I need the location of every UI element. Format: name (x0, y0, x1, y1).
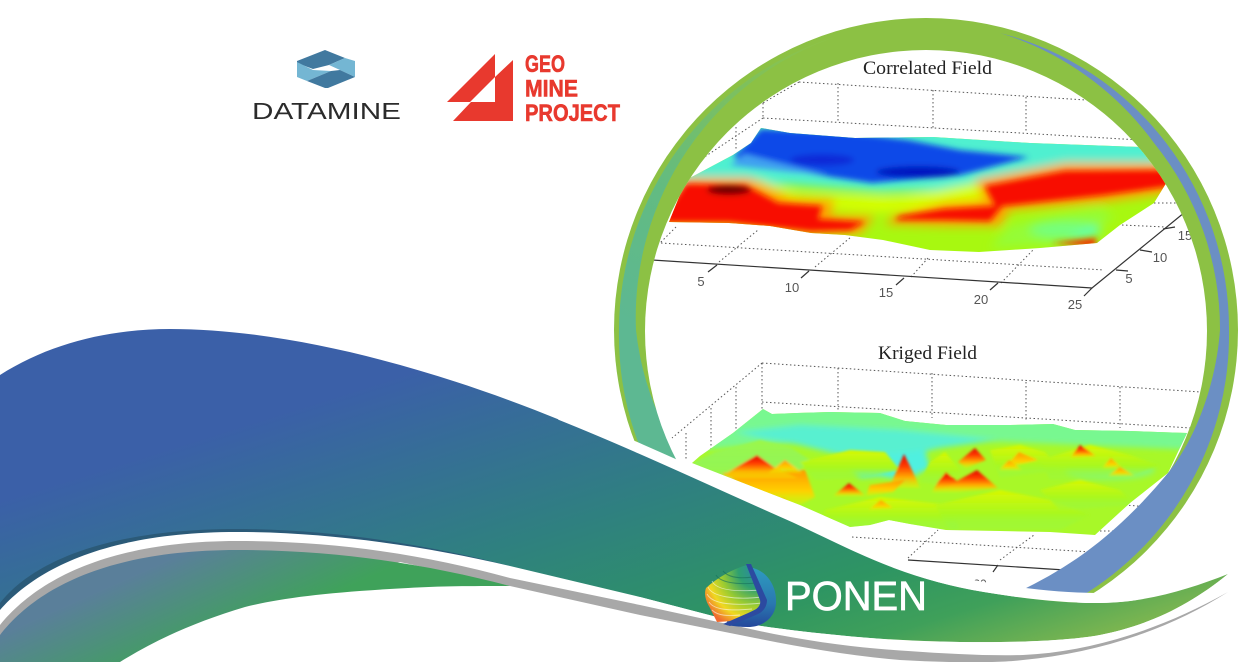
wordmark: DATAMINE: DATAMINE (252, 98, 401, 124)
wave: main gradient shape (0, 329, 1228, 642)
axis labels: 5 (1125, 271, 1133, 286)
chart images clipped to the circle (640, 59, 1201, 591)
axis labels: 10 (785, 280, 799, 295)
logo: Ponen (705, 564, 927, 627)
icon: red triangles (447, 54, 513, 121)
chart: Kriged Field (672, 344, 1201, 591)
ribbon: layered sweep under the wave (0, 529, 1240, 662)
grid lines (660, 82, 1179, 283)
wordmark: GEO MINE PROJECT: MINE (525, 76, 578, 102)
axis (908, 560, 1065, 572)
icon: Datamine hexagon (297, 50, 355, 88)
white interior (645, 50, 1207, 612)
wave: white highlight along the upper edge (560, 415, 1137, 598)
axis labels: 20 (974, 292, 988, 307)
ribbon inner gradient (0, 550, 510, 662)
ribbon dark edge (0, 529, 510, 662)
wordmark: GEO MINE PROJECT (525, 51, 620, 127)
green outer ring (614, 18, 1238, 642)
axis labels: 10 (1153, 250, 1167, 265)
axis label: 20 (973, 577, 987, 591)
axis labels: 5 (697, 274, 705, 289)
axis labels: 15 (1178, 228, 1192, 243)
axis labels (697, 228, 1192, 312)
circular frame (614, 18, 1238, 642)
logo: Datamine (252, 50, 401, 124)
blue right crescent (1000, 33, 1229, 597)
title: Correlated Field: Correlated Field (863, 59, 993, 79)
teal left crescent (619, 37, 835, 470)
axis labels: 15 (879, 285, 893, 300)
wordmark: GEO MINE PROJECT: PROJECT (525, 100, 620, 127)
title: Kriged Field: Kriged Field (878, 344, 978, 364)
surface: correlated heat map (669, 128, 1166, 252)
grid lines (672, 363, 1201, 560)
axis labels: 25 (1068, 297, 1082, 312)
axes (652, 208, 1190, 296)
ribbon grey band (0, 541, 1228, 662)
wordmark: GEO MINE PROJECT: GEO (525, 51, 565, 78)
wordmark: PONEN: PONEN (785, 573, 927, 619)
logo: Geo Mine Project (447, 51, 620, 127)
chart: Correlated Field (640, 59, 1192, 312)
icon: Ponen layered shield (705, 564, 776, 627)
ribbon white band (0, 532, 1240, 662)
surface: kriged heat map (692, 409, 1187, 535)
